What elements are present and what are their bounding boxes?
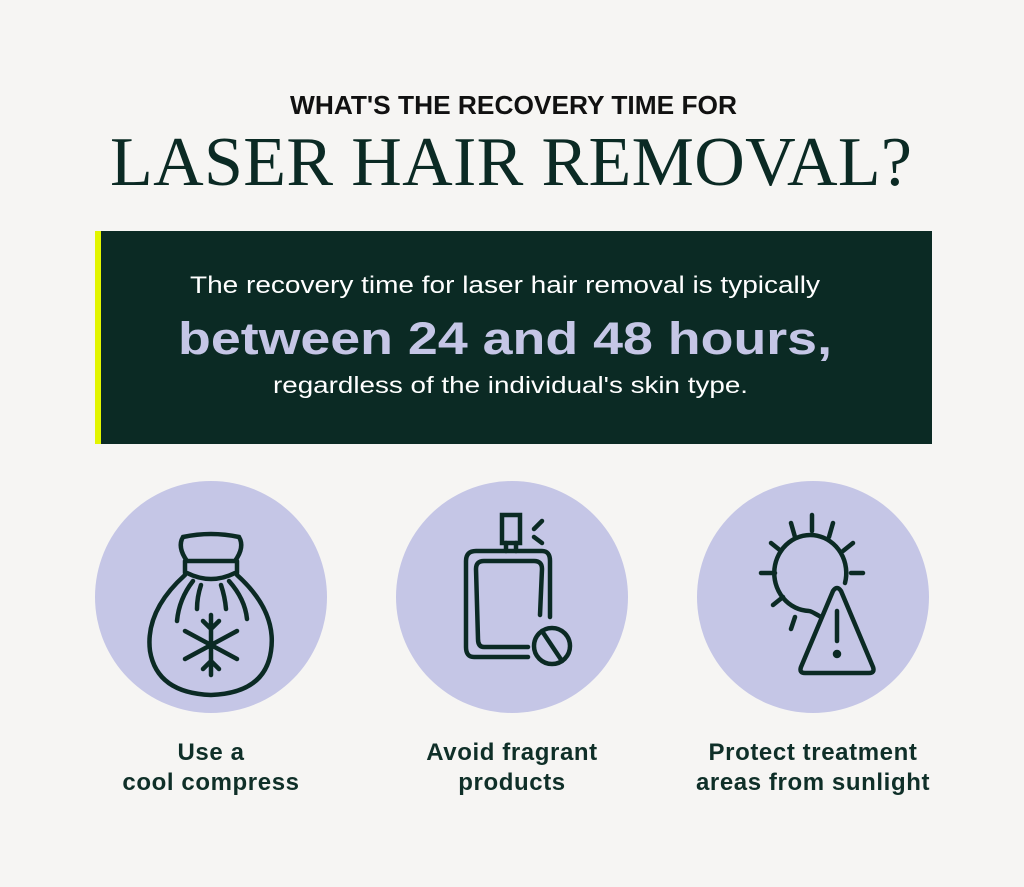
summary text: The recovery time for laser hair removal is typically xyxy=(190,272,820,299)
panel: sunlight xyxy=(696,481,930,796)
label: cool compress xyxy=(122,769,300,796)
subtitle: WHAT'S THE RECOVERY TIME FOR xyxy=(290,90,737,120)
label: Use a xyxy=(177,739,245,766)
summary text xyxy=(178,272,832,398)
label xyxy=(122,739,300,796)
icon: ice bag xyxy=(95,481,327,713)
summary text: regardless of the individual's skin type. xyxy=(273,372,748,398)
label xyxy=(426,739,598,796)
label: Avoid fragrant xyxy=(426,739,598,766)
summary text: between 24 and 48 hours, xyxy=(178,313,832,364)
heading xyxy=(110,90,912,200)
label xyxy=(696,739,930,796)
panel: fragrant products xyxy=(396,481,628,796)
title: LASER HAIR REMOVAL? xyxy=(110,124,912,200)
label: products xyxy=(458,769,566,796)
label: Protect treatment xyxy=(709,739,917,766)
icon: sun warning xyxy=(697,481,929,713)
panel: cool compress xyxy=(95,481,327,796)
icon: perfume bottle xyxy=(396,481,628,713)
label: areas from sunlight xyxy=(696,769,930,796)
summary box xyxy=(95,231,932,444)
